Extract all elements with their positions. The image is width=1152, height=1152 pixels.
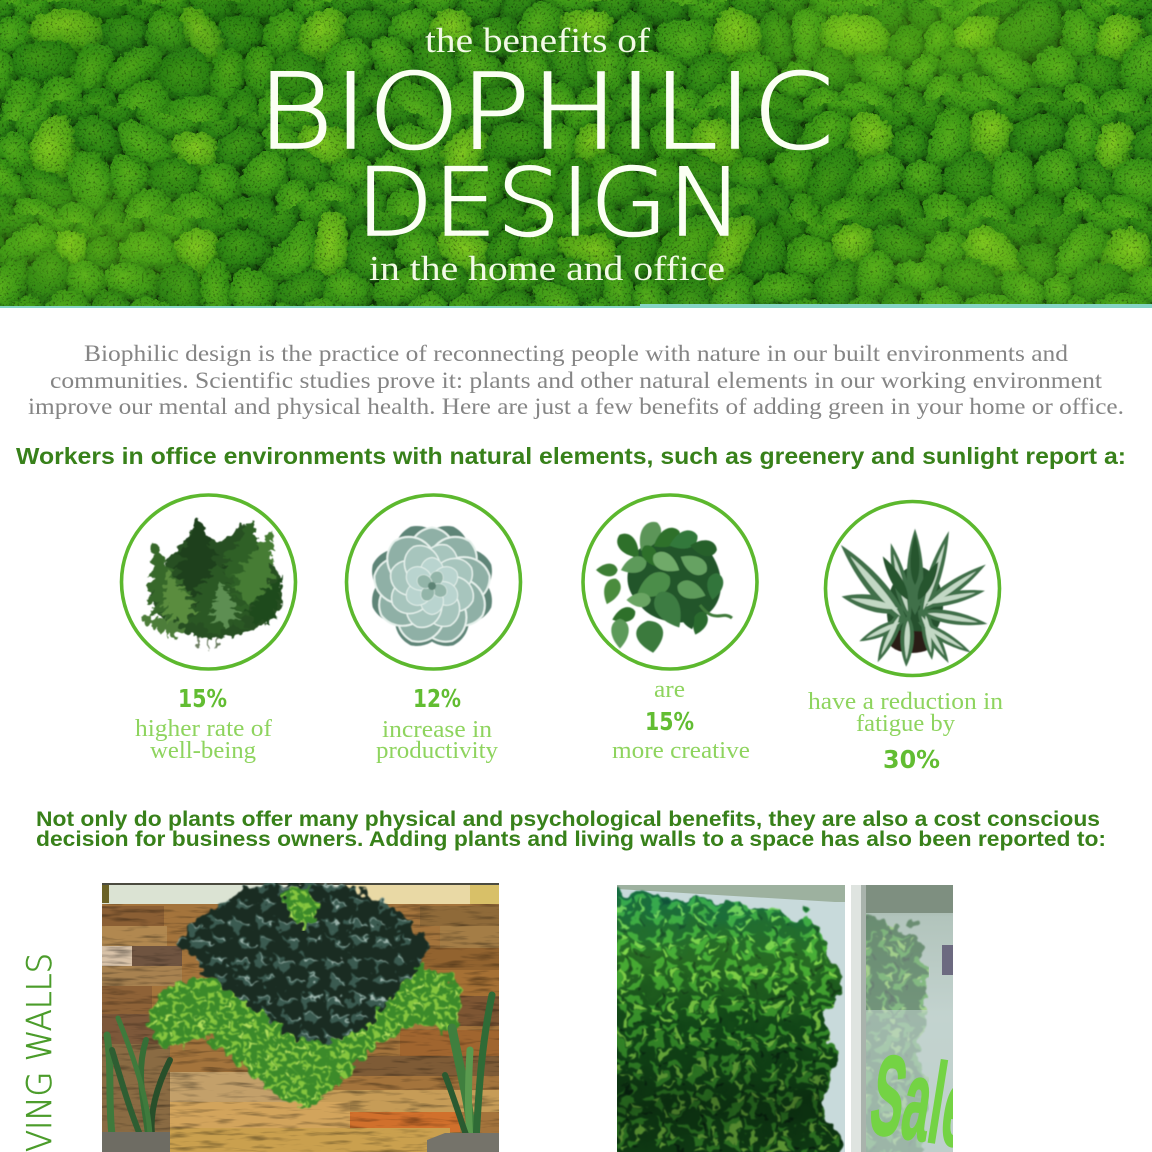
- foliage: [590, 892, 842, 1152]
- photo: living wall in office: [617, 885, 953, 1152]
- glass panel: [866, 913, 953, 1152]
- caption: higher rate of: [135, 716, 272, 742]
- title line 4: in the home and office: [369, 249, 725, 288]
- circle frame: [826, 502, 1000, 676]
- stat: well-being: [122, 495, 298, 764]
- value: 30%: [883, 745, 940, 774]
- wood planks: [102, 883, 500, 1152]
- left pot: [102, 1132, 170, 1152]
- stat: productivity: [346, 495, 520, 764]
- title: BIOPHILIC: BIOPHILIC: [257, 51, 834, 173]
- center light leaves: [283, 887, 320, 927]
- intro paragraph: Biophilic design is the practice of reconnecting people with nature in our built environments and: [84, 341, 1069, 366]
- caption: increase in: [382, 717, 492, 743]
- heading: cost conscious: decision for business owners. Adding plants and living walls to a space has also been reported to:: [36, 828, 1106, 851]
- caption: have a reduction in: [808, 689, 1003, 715]
- title line 1: the benefits of: [425, 21, 650, 60]
- circle frame: [346, 495, 520, 669]
- teal strip under banner: [0, 304, 1152, 308]
- moss background: [0, 0, 1152, 306]
- intro paragraph: improve our mental and physical health. Here are just a few benefits of adding green in your home or office.: [28, 394, 1124, 419]
- left snake plant: [107, 1018, 170, 1135]
- dark central foliage: [178, 882, 428, 1041]
- icon: fern: [131, 515, 298, 648]
- glass reflection: [866, 885, 953, 1152]
- value: 15%: [645, 707, 694, 736]
- circle frame: [122, 495, 296, 669]
- photo: living wall on wood: [102, 882, 500, 1152]
- stat: well-being: well-being: [150, 738, 256, 764]
- top beam: [617, 885, 845, 902]
- heading: workers: Workers in office environments with natural elements, such as greenery and sunlight report a:: [16, 443, 1126, 469]
- wall background: [617, 885, 847, 1152]
- value: 15%: [178, 684, 227, 713]
- caption top: are: [654, 677, 685, 703]
- right snake plant: [445, 995, 492, 1140]
- ceiling strip: [102, 883, 499, 904]
- heading: cost conscious: [36, 808, 1106, 851]
- intro paragraph: communities. Scientific studies prove it: plants and other natural elements in our working environment: [50, 368, 1103, 393]
- caption: more creative: [612, 738, 750, 764]
- circle frame: [583, 495, 757, 669]
- stat: fatigue: [808, 502, 1003, 774]
- stat: creativity: [583, 495, 757, 764]
- stat: fatigue: fatigue by: [856, 711, 955, 737]
- value: 12%: [413, 684, 461, 713]
- icon: succulent: [364, 518, 500, 654]
- light trailing foliage: [148, 965, 462, 1108]
- stat: productivity: productivity: [376, 738, 498, 764]
- icon: pothos: [596, 518, 732, 655]
- icon: aglaonema plant: [834, 529, 990, 667]
- title: DESIGN: DESIGN: [356, 149, 743, 258]
- right pot: [427, 1133, 499, 1152]
- header banner: moss wall: [0, 0, 1152, 308]
- heading: cost conscious: Not only do plants offer many physical and psychological benefits, they are also a cost conscious: [36, 808, 1100, 831]
- vertical label: living walls: VING WALLS: [20, 953, 60, 1152]
- intro paragraph: [28, 341, 1124, 419]
- partition post: [845, 885, 847, 1152]
